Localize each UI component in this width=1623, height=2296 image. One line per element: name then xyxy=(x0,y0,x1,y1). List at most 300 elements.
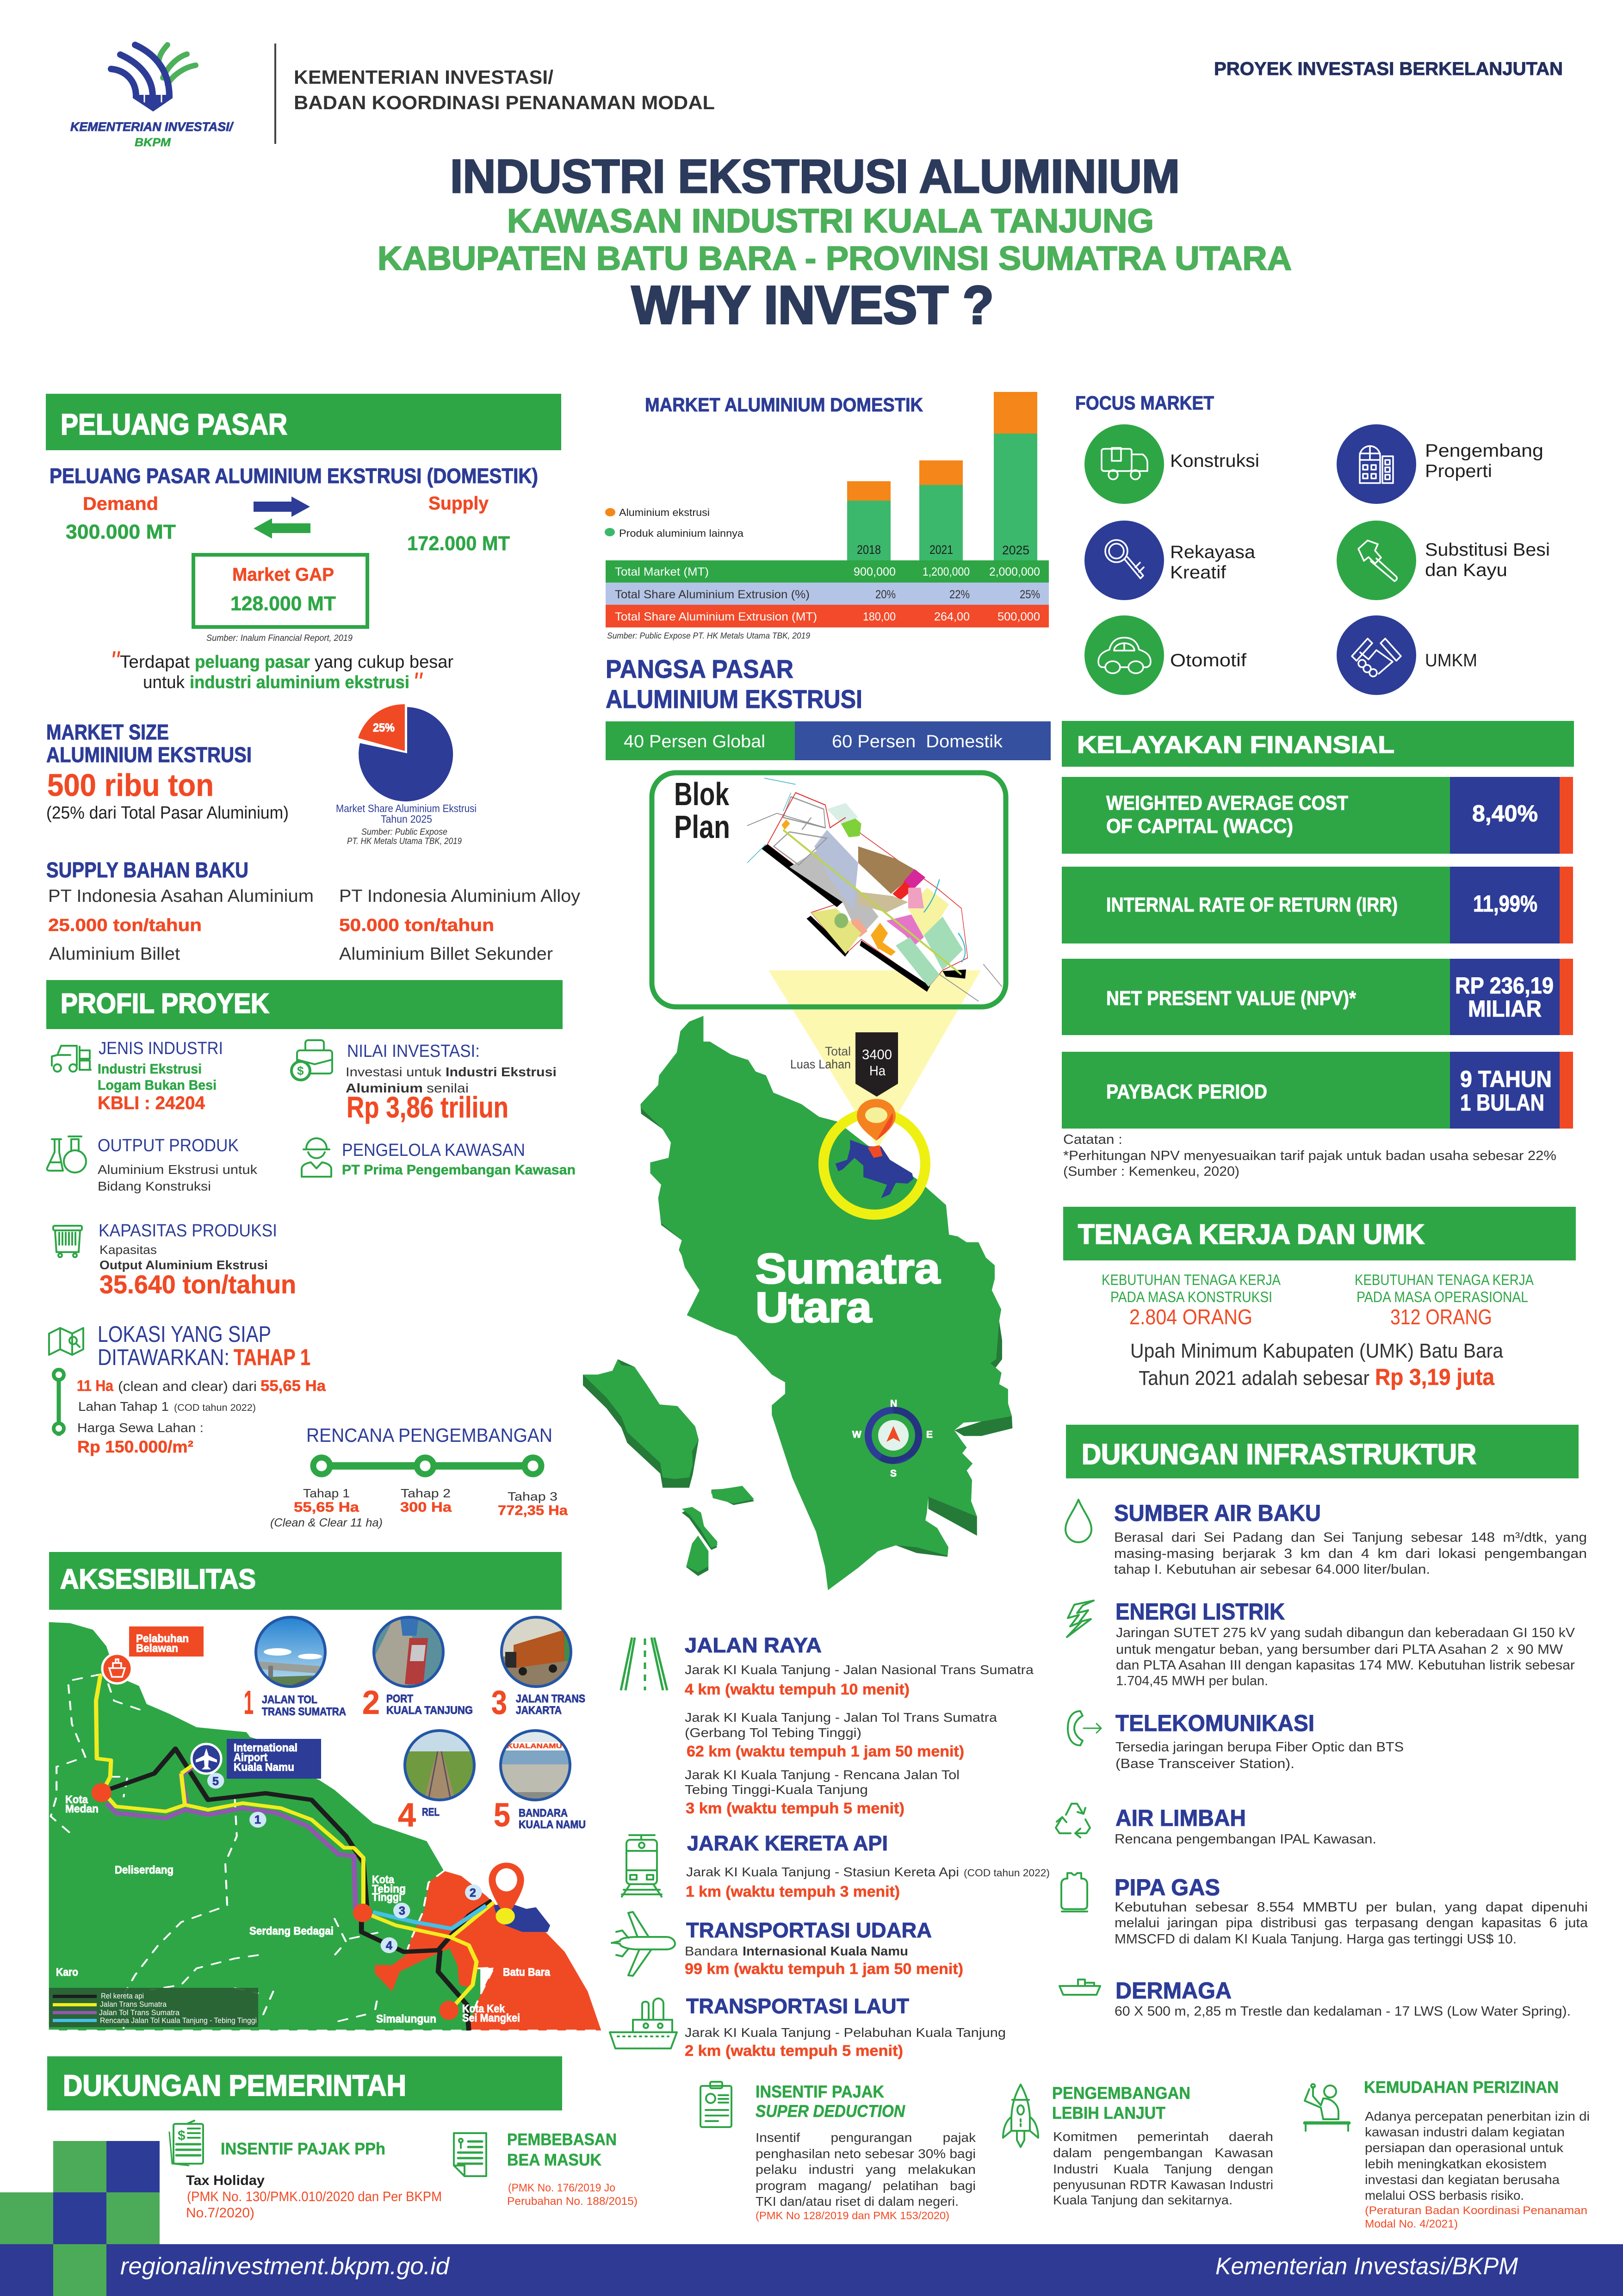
quote: peluang pasar xyxy=(195,652,310,672)
energi listrik: Jaringan SUTET 275 kV yang sudah dibangun dan keberadaan GI 150 kV xyxy=(1116,1626,1575,1640)
icon: port xyxy=(102,1654,132,1683)
map place names: Sei Mangkei xyxy=(462,2012,520,2024)
icon: compass: N xyxy=(890,1398,897,1409)
pie chart: market share: 25% xyxy=(373,721,395,734)
icon: cart xyxy=(53,1226,82,1257)
title: WHY INVEST ? xyxy=(632,275,994,335)
heading: Blok xyxy=(674,776,729,812)
timeline: tahap 1 details: 55,65 Ha xyxy=(260,1377,326,1394)
telekomunikasi xyxy=(1115,1710,1404,1771)
route number labels: 1 xyxy=(254,1813,261,1826)
share bar xyxy=(606,721,1051,760)
insentif pajak pph: Tax Holiday xyxy=(186,2173,265,2188)
section heading: TENAGA KERJA DAN UMK xyxy=(1078,1219,1425,1250)
item: rekayasa kreatif: Kreatif xyxy=(1170,563,1226,583)
timeline: tahap 1 details: Lahan Tahap 1 xyxy=(78,1399,169,1414)
ministry name: BADAN KOORDINASI PENANAMAN MODAL xyxy=(294,92,715,113)
photo captions: REL xyxy=(422,1806,440,1818)
section heading: DUKUNGAN INFRASTRUKTUR xyxy=(1082,1439,1476,1471)
jarak kereta api: 1 km (waktu tempuh 3 menit) xyxy=(686,1883,900,1900)
map place names: Tebing xyxy=(372,1883,406,1895)
quote: " xyxy=(413,667,423,698)
supply bahan baku: PT Indonesia Asahan Aluminium xyxy=(48,887,314,906)
footer xyxy=(0,2141,1623,2296)
timeline: tahap 1 details: (COD tahun 2022) xyxy=(174,1402,256,1413)
photo captions: KUALA TANJUNG xyxy=(386,1704,473,1717)
pengembangan lebih lanjut: penyusunan RDTR Kawasan Industri xyxy=(1053,2178,1273,2192)
icon: worker xyxy=(302,1138,331,1177)
heading: PANGSA PASAR xyxy=(606,654,793,683)
air limbah xyxy=(1115,1805,1376,1847)
demand: 300.000 MT xyxy=(66,521,176,543)
supply bahan baku: Aluminium Billet Sekunder xyxy=(339,944,553,964)
icon: compass xyxy=(852,1398,933,1479)
nilai investasi xyxy=(346,1042,557,1124)
photo captions: 5 xyxy=(494,1797,510,1834)
pembebasan bea masuk: BEA MASUK xyxy=(507,2150,601,2169)
map: sumatra utara xyxy=(583,970,1012,1590)
panel: peluang pasar xyxy=(46,394,580,964)
photo captions: JALAN TOL xyxy=(262,1694,317,1706)
pembebasan bea masuk: PEMBEBASAN xyxy=(507,2130,617,2149)
icon: tax document: $ xyxy=(178,2128,186,2143)
page header xyxy=(70,43,1563,149)
lokasi yang siap: DITAWARKAN: xyxy=(98,1345,229,1370)
item: konstruksi: Konstruksi xyxy=(1170,451,1259,471)
pie chart: market share xyxy=(336,704,477,846)
market gap callout: 128.000 MT xyxy=(230,592,336,615)
sumber air baku: SUMBER AIR BAKU xyxy=(1114,1500,1321,1526)
timeline: tahap 1 details: (clean and clear) dari xyxy=(118,1379,257,1394)
share bar: 40 Persen Global xyxy=(624,732,765,751)
row: npv: MILIAR xyxy=(1468,996,1542,1022)
row: wacc: OF CAPITAL (WACC) xyxy=(1106,815,1293,838)
timeline: tahap 1 details: 11 Ha xyxy=(77,1377,114,1394)
map land xyxy=(49,1622,480,2030)
icon: recycle xyxy=(1056,1804,1090,1837)
section heading: KELAYAKAN FINANSIAL xyxy=(1077,732,1394,758)
region: batu bara xyxy=(375,1871,601,2030)
footnote xyxy=(1063,1132,1556,1179)
pengembangan lebih lanjut: PENGEMBANGAN xyxy=(1052,2084,1190,2103)
item: pengembang properti xyxy=(1337,424,1543,504)
supply bahan baku xyxy=(46,858,580,964)
supply: Supply xyxy=(428,493,489,514)
map place names: Karo xyxy=(56,1966,78,1979)
panel: tenaga kerja dan umk xyxy=(1063,1207,1576,1390)
icon: water drop xyxy=(1065,1500,1091,1542)
pengelola kawasan: PENGELOLA KAWASAN xyxy=(342,1141,525,1160)
callout: airport: Kuala Namu xyxy=(234,1761,294,1774)
route: planned toll xyxy=(373,1905,486,1929)
data table: 900,000 xyxy=(854,565,896,578)
photo captions: TRANS SUMATRA xyxy=(262,1706,346,1718)
jenis industri: Logam Bukan Besi xyxy=(98,1078,217,1093)
nilai investasi: Aluminium xyxy=(346,1081,423,1095)
footnote: *Perhitungan NPV menyesuaikan tarif pajak untuk badan usaha sebesar 22% xyxy=(1063,1148,1556,1163)
icon: compass: W xyxy=(852,1429,861,1440)
location ring xyxy=(824,1113,925,1215)
output produk xyxy=(98,1136,258,1193)
insentif pajak pph: (PMK No. 130/PMK.010/2020 dan Per BKPM xyxy=(187,2189,442,2204)
item: otomotif xyxy=(1084,615,1246,695)
insentif pajak super deduction: penghasilan neto sebesar 30% bagi xyxy=(756,2147,976,2161)
telekomunikasi: Tersedia jaringan berupa Fiber Optic dan BTS xyxy=(1115,1740,1404,1755)
map place names: Simalungun xyxy=(376,2013,436,2025)
photo: port xyxy=(372,1616,445,1688)
kapasitas produksi: KAPASITAS PRODUKSI xyxy=(99,1221,277,1241)
labour: construction xyxy=(1102,1272,1281,1329)
insentif pajak pph: INSENTIF PAJAK PPh xyxy=(221,2139,385,2158)
energi listrik: ENERGI LISTRIK xyxy=(1115,1599,1285,1625)
photo: rail xyxy=(403,1728,477,1802)
kapasitas produksi xyxy=(99,1221,296,1299)
panel: focus market xyxy=(1075,392,1550,695)
rencana pengembangan: RENCANA PENGEMBANGAN xyxy=(306,1424,552,1446)
item: substitusi besi dan kayu xyxy=(1337,521,1550,600)
arrows: demand and supply xyxy=(254,496,310,539)
section heading xyxy=(1063,1207,1576,1260)
data table: 20% xyxy=(875,588,896,601)
jarak kereta api xyxy=(686,1831,1050,1900)
photo captions xyxy=(244,1684,586,1834)
heading: ALUMINIUM EKSTRUSI xyxy=(606,684,862,714)
timeline: tahap 1 details: Rp 150.000/m² xyxy=(77,1437,193,1456)
data table: 264,00 xyxy=(934,610,970,623)
labour: construction: 2.804 ORANG xyxy=(1129,1305,1252,1329)
data table: 500,000 xyxy=(997,610,1040,623)
icon: forklift xyxy=(52,1046,91,1072)
item: substitusi besi dan kayu: Substitusi Besi xyxy=(1425,540,1550,560)
kemudahan perizinan xyxy=(1364,2078,1590,2230)
row: payback: PAYBACK PERIOD xyxy=(1106,1080,1267,1103)
icon: flasks xyxy=(47,1136,86,1173)
rencana pengembangan: Tahap 3 xyxy=(508,1489,558,1503)
section heading xyxy=(47,2056,562,2110)
pengelola kawasan xyxy=(342,1141,576,1178)
timeline: tahap 1 details xyxy=(54,1370,326,1456)
map title: Sumatra xyxy=(756,1245,941,1292)
photo: airport terminal xyxy=(498,1728,572,1801)
icon: official at desk xyxy=(1305,2084,1349,2131)
section heading xyxy=(49,1552,562,1610)
pipa gas: MMSCFD di dalam KI Kuala Tanjung. Harga gas tertinggi US$ 10. xyxy=(1115,1932,1517,1947)
footnote: (Sumber : Kemenkeu, 2020) xyxy=(1063,1164,1239,1179)
energi listrik xyxy=(1115,1599,1575,1688)
timeline: tahap 1 details: Harga Sewa Lahan : xyxy=(77,1421,204,1435)
route number labels: 3 xyxy=(399,1905,405,1917)
chart legend xyxy=(605,507,744,539)
rencana pengembangan: 300 Ha xyxy=(400,1500,452,1515)
kapasitas produksi: 35.640 ton/tahun xyxy=(99,1270,296,1299)
dermaga xyxy=(1115,1978,1571,2019)
market size: (25% dari Total Pasar Aluminium) xyxy=(46,803,289,823)
photo captions: PORT xyxy=(386,1693,413,1705)
labour: operational: PADA MASA OPERASIONAL xyxy=(1357,1289,1528,1305)
kemudahan perizinan: Adanya percepatan penerbitan izin di xyxy=(1365,2109,1590,2123)
map legend: Jalan Tol Trans Sumatra xyxy=(99,2008,180,2017)
logo caption xyxy=(70,120,234,149)
icon: location pin xyxy=(857,1099,896,1141)
photo captions: 2 xyxy=(362,1684,380,1721)
program tag: PROYEK INVESTASI BERKELANJUTAN xyxy=(1214,59,1563,79)
supply bahan baku: PT Indonesia Aluminium Alloy xyxy=(339,887,580,906)
supply bahan baku: 25.000 ton/tahun xyxy=(48,916,202,935)
section heading: AKSESIBILITAS xyxy=(60,1564,256,1595)
section heading: DUKUNGAN PEMERINTAH xyxy=(63,2069,406,2102)
sumber air baku: tahap I. Kebutuhan air sebesar 64.000 liter/bulan. xyxy=(1114,1562,1430,1577)
chart heading: MARKET ALUMINIUM DOMESTIK xyxy=(645,394,923,416)
map place names: Tinggi xyxy=(372,1891,402,1904)
map title xyxy=(756,1245,941,1331)
rencana pengembangan: (Clean & Clear 11 ha) xyxy=(270,1516,383,1529)
map legend: Rencana Jalan Tol Kuala Tanjung - Tebing Tinggi xyxy=(100,2016,257,2025)
pengembangan lebih lanjut xyxy=(1052,2084,1273,2207)
energi listrik: dan PLTA Asahan III dengan kapasitas 174 MW. Kebutuhan listrik sebesar xyxy=(1116,1658,1575,1673)
jalan raya: Jarak KI Kuala Tanjung - Rencana Jalan Tol xyxy=(685,1768,960,1782)
sumber air baku xyxy=(1114,1500,1587,1577)
callout: pelabuhan belawan xyxy=(129,1626,204,1657)
jalan raya: Jarak KI Kuala Tanjung - Jalan Tol Trans Sumatra xyxy=(685,1710,997,1725)
pipa gas: PIPA GAS xyxy=(1115,1874,1220,1900)
supply xyxy=(407,493,510,555)
jenis industri: JENIS INDUSTRI xyxy=(99,1039,223,1058)
insentif pajak super deduction: INSENTIF PAJAK xyxy=(756,2082,884,2101)
subheading: PELUANG PASAR ALUMINIUM EKSTRUSI (DOMESTIK) xyxy=(50,464,538,488)
photo captions: JAKARTA xyxy=(516,1704,562,1717)
route: toll road xyxy=(106,1767,356,1912)
icon: phone xyxy=(1068,1711,1101,1745)
title xyxy=(378,150,1292,335)
panel: kelayakan finansial xyxy=(1062,721,1574,1179)
route numbers xyxy=(207,1773,482,1953)
bar chart: 2025 xyxy=(1002,543,1029,557)
supply: 172.000 MT xyxy=(407,532,510,555)
bar chart: 2021 xyxy=(929,543,953,557)
icon: location pin xyxy=(489,1862,524,1924)
city markers xyxy=(92,1783,458,2020)
panel: market aluminium domestik xyxy=(605,392,1049,640)
row: wacc: WEIGHTED AVERAGE COST xyxy=(1106,792,1348,814)
data table: Total Share Aluminium Extrusion (MT) xyxy=(615,610,817,623)
icon: clipboard xyxy=(700,2082,731,2127)
market gap callout: Market GAP xyxy=(232,565,334,585)
energi listrik: 1.704,45 MWH per bulan. xyxy=(1116,1674,1268,1688)
kemudahan perizinan: persiapan dan operasional untuk xyxy=(1365,2141,1564,2155)
icon: train xyxy=(622,1835,662,1897)
source note: Sumber: Public Expose PT. HK Metals Utama TBK, 2019 xyxy=(607,631,810,640)
kemudahan perizinan: kawasan industri dalam kegiatan xyxy=(1365,2125,1565,2139)
rencana pengembangan: Tahap 2 xyxy=(401,1486,451,1500)
panel: pangsa pasar xyxy=(606,654,1051,760)
transportasi laut: 2 km (waktu tempuh 5 menit) xyxy=(685,2042,903,2059)
map surface xyxy=(583,1016,1012,1590)
footer bar xyxy=(0,2244,1623,2296)
icon: briefcase: $ xyxy=(297,1064,304,1078)
panel: dukungan pemerintah xyxy=(47,2056,638,2221)
pengembangan lebih lanjut: Komitmen pemerintah daerah xyxy=(1053,2129,1273,2144)
minimum wage: Tahun 2021 adalah sebesar xyxy=(1139,1367,1369,1390)
jenis industri: Industri Ekstrusi xyxy=(98,1061,202,1077)
market size: ALUMINIUM EKSTRUSI xyxy=(46,743,252,767)
jalan raya: JALAN RAYA xyxy=(685,1633,822,1657)
route number labels: 2 xyxy=(470,1886,476,1899)
item: pengembang properti: Properti xyxy=(1425,461,1492,481)
row: wacc xyxy=(1062,777,1573,854)
callout: total land area xyxy=(790,1032,898,1097)
pipa gas: melalui jaringan pipa distribusi gas terpasang dengan kapasitas 6 juta xyxy=(1115,1916,1588,1930)
logo caption: BKPM xyxy=(135,136,171,149)
pengembangan lebih lanjut: Industri Kuala Tanjung dengan xyxy=(1053,2162,1273,2176)
data table: 22% xyxy=(949,588,970,601)
map place names xyxy=(56,1793,551,2025)
insentif pajak super deduction: pelaku industri yang melakukan xyxy=(756,2162,976,2177)
minimum wage xyxy=(1130,1340,1503,1390)
row: payback xyxy=(1062,1052,1573,1129)
insentif pajak super deduction: (PMK No 128/2019 dan PMK 153/2020) xyxy=(756,2209,949,2222)
data table: Total Market (MT) xyxy=(615,565,709,578)
transportasi laut: Jarak KI Kuala Tanjung - Pelabuhan Kuala Tanjung xyxy=(685,2025,1006,2040)
nilai investasi: NILAI INVESTASI: xyxy=(347,1042,480,1061)
heading xyxy=(674,776,730,845)
map title: Utara xyxy=(756,1284,872,1331)
market size: MARKET SIZE xyxy=(46,720,169,744)
region: kuala tanjung xyxy=(494,1902,550,1932)
row: npv xyxy=(1062,959,1573,1035)
kemudahan perizinan: investasi dan kegiatan berusaha xyxy=(1365,2172,1560,2187)
share bar: 60 Persen Domestik xyxy=(832,732,1003,751)
route number labels xyxy=(212,1775,476,1952)
pie chart: market share: Sumber: Public Expose xyxy=(361,827,447,837)
pipa gas xyxy=(1115,1874,1588,1947)
route number labels: 4 xyxy=(386,1939,392,1952)
transportasi laut xyxy=(685,1994,1006,2059)
panel: transportasi xyxy=(610,1633,1050,2059)
bar chart: 2018 xyxy=(857,543,881,557)
kemudahan perizinan: (Peraturan Badan Koordinasi Penanaman xyxy=(1365,2204,1587,2217)
photo captions: 1 xyxy=(244,1684,254,1721)
icon: gas cylinder xyxy=(1061,1873,1087,1911)
header divider xyxy=(274,43,276,144)
panel: dukungan infrastruktur xyxy=(1056,1425,1588,2019)
pie chart: market share: Market Share Aluminium Ekstrusi xyxy=(336,802,477,814)
insentif pajak super deduction xyxy=(756,2082,976,2222)
icon: compass: E xyxy=(926,1429,933,1440)
row: irr: 11,99% xyxy=(1473,891,1537,917)
photo: jalan tol xyxy=(254,1615,328,1689)
pengembangan lebih lanjut: dalam pengembangan Kawasan xyxy=(1053,2146,1273,2160)
labour: operational: KEBUTUHAN TENAGA KERJA xyxy=(1355,1272,1534,1288)
labour: construction: KEBUTUHAN TENAGA KERJA xyxy=(1102,1272,1281,1288)
transportasi udara: Internasional Kuala Namu xyxy=(743,1944,908,1958)
item: rekayasa kreatif: Rekayasa xyxy=(1170,542,1255,562)
section heading xyxy=(1062,721,1574,767)
callout: airport: International xyxy=(234,1742,297,1754)
transportasi udara: Bandara xyxy=(685,1944,738,1958)
output produk: Aluminium Ekstrusi untuk xyxy=(98,1162,258,1177)
jenis industri xyxy=(98,1039,223,1113)
nilai investasi: Rp 3,86 triliun xyxy=(347,1091,508,1124)
map place names: Kota xyxy=(65,1793,88,1806)
photo captions: 3 xyxy=(491,1684,507,1721)
route: railway xyxy=(103,1749,492,2030)
map legend: Jalan Trans Sumatra xyxy=(100,2000,167,2009)
map legend: Rel kereta api xyxy=(101,1992,144,2000)
section heading xyxy=(1066,1425,1579,1478)
data table: 2,000,000 xyxy=(989,565,1040,578)
item: konstruksi xyxy=(1084,424,1259,504)
kapasitas produksi: Kapasitas xyxy=(99,1243,157,1257)
data table: 1,200,000 xyxy=(923,565,970,578)
pie chart: market share: PT. HK Metals Utama TBK, 2019 xyxy=(347,837,462,846)
panel: blok plan xyxy=(652,773,1006,1007)
insentif pajak super deduction: program magang/ pelatihan bagi xyxy=(756,2178,976,2193)
icon: road xyxy=(621,1638,667,1690)
labour: operational: 312 ORANG xyxy=(1390,1305,1492,1329)
title: INDUSTRI EKSTRUSI ALUMINIUM xyxy=(450,150,1180,203)
heading: FOCUS MARKET xyxy=(1075,392,1214,414)
row: npv: NET PRESENT VALUE (NPV)* xyxy=(1106,987,1357,1010)
data table: 180,00 xyxy=(863,610,896,623)
icon: jetty xyxy=(1059,1980,1100,1995)
pengembangan lebih lanjut: Kuala Tanjung dan sekitarnya. xyxy=(1053,2193,1233,2207)
jalan raya: Tebing Tinggi-Kuala Tanjung xyxy=(685,1782,868,1797)
kapasitas produksi: Output Aluminium Ekstrusi xyxy=(99,1258,268,1272)
air limbah: Rencana pengembangan IPAL Kawasan. xyxy=(1115,1832,1376,1847)
icon: lightning xyxy=(1067,1601,1094,1637)
map shadow xyxy=(583,1016,1012,1582)
quote: industri aluminium ekstrusi xyxy=(190,673,409,692)
dermaga: DERMAGA xyxy=(1115,1978,1232,2004)
quote xyxy=(110,645,453,698)
callout: pelabuhan belawan: Pelabuhan xyxy=(136,1632,189,1645)
kemudahan perizinan: melalui OSS berbasis risiko. xyxy=(1365,2188,1524,2203)
ministry name xyxy=(294,66,715,113)
map place names: Kota Kek xyxy=(462,2003,505,2015)
rencana pengembangan: 55,65 Ha xyxy=(294,1500,359,1515)
bar chart xyxy=(847,392,1037,560)
map place names: Kota xyxy=(372,1874,395,1886)
callout: total land area: 3400 xyxy=(862,1047,892,1062)
market size xyxy=(46,720,289,823)
dermaga: 60 X 500 m, 2,85 m Trestle dan kedalaman - 17 LWS (Low Water Spring). xyxy=(1115,2004,1571,2019)
map place names: Deliserdang xyxy=(115,1864,173,1876)
icon: ship xyxy=(610,1998,677,2048)
jenis industri: KBLI : 24204 xyxy=(98,1093,205,1113)
icon: briefcase xyxy=(291,1040,332,1080)
route: trans sumatra xyxy=(96,1674,494,2006)
callout: total land area: Luas Lahan xyxy=(790,1057,851,1071)
icon: tax document xyxy=(169,2121,203,2166)
ministry name: KEMENTERIAN INVESTASI/ xyxy=(294,66,553,88)
lokasi yang siap: TAHAP 1 xyxy=(234,1345,310,1370)
pipa gas: Kebutuhan sebesar 8.554 MMBTU per bulan, yang dapat dipenuhi xyxy=(1115,1900,1588,1915)
pembebasan bea masuk xyxy=(507,2130,638,2208)
supply bahan baku: 50.000 ton/tahun xyxy=(339,916,494,935)
row: npv: RP 236,19 xyxy=(1455,973,1554,999)
insentif pajak super deduction: Insentif pengurangan pajak xyxy=(756,2130,976,2145)
map place names: Serdang Bedagai xyxy=(249,1925,334,1937)
callout: total land area: Ha xyxy=(869,1063,886,1079)
panel: insentif lanjutan xyxy=(700,2078,1590,2230)
panel: aksesibilitas xyxy=(49,1552,601,2030)
quote: " xyxy=(110,645,121,676)
quote: Terdapat xyxy=(120,652,190,672)
jarak kereta api: (COD tahun 2022) xyxy=(964,1867,1050,1879)
title: KABUPATEN BATU BARA - PROVINSI SUMATRA UTARA xyxy=(378,240,1292,277)
jalan raya: 3 km (waktu tempuh 5 menit) xyxy=(686,1800,904,1817)
photo: truck xyxy=(500,1615,574,1689)
